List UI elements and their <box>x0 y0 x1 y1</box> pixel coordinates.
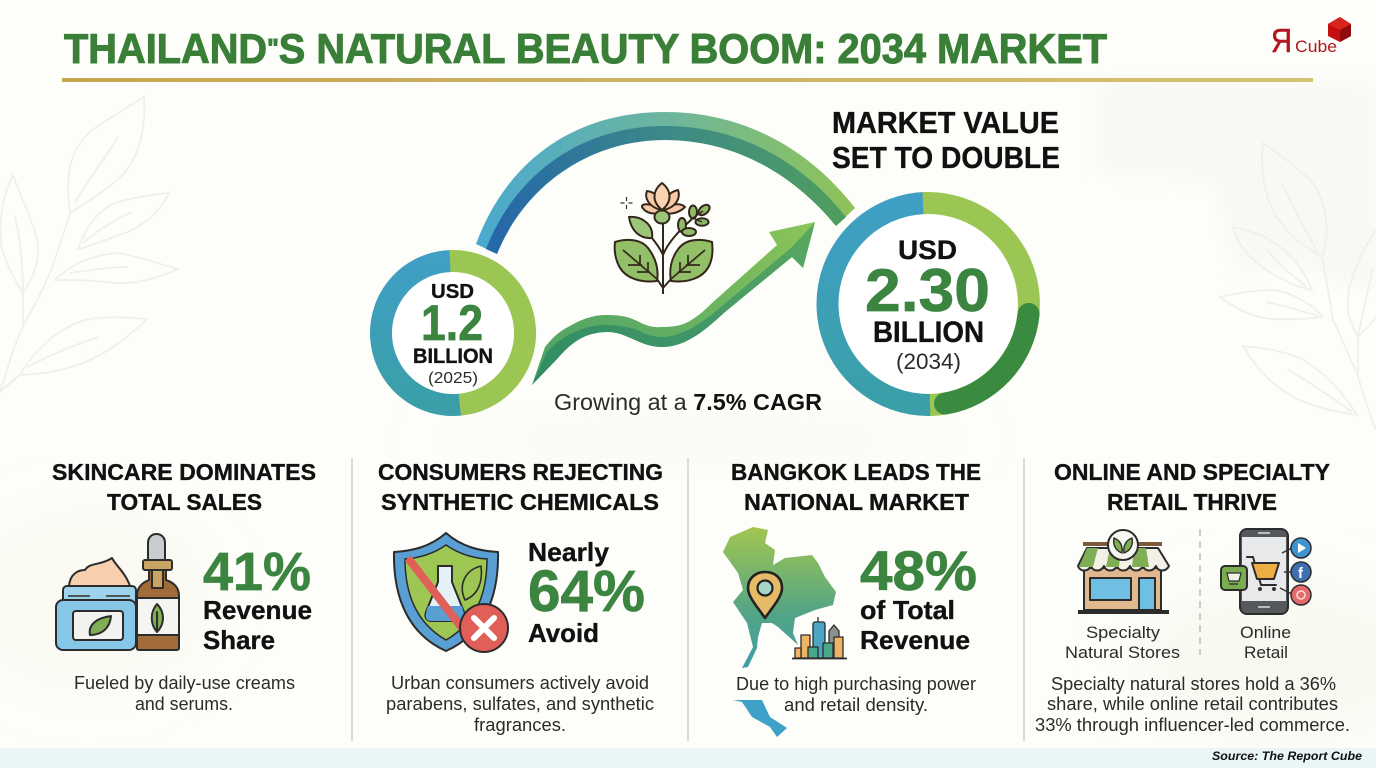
icon: online shopping phone: f <box>1298 565 1304 582</box>
panel: skincare <box>52 459 316 714</box>
icon: online shopping phone <box>1221 529 1311 614</box>
panel: bangkok: of Total <box>860 595 955 625</box>
growth arrow <box>532 222 815 385</box>
panel: online and specialty retail: share, while online retail contributes <box>1047 694 1338 714</box>
value ring 2034: 2.30 <box>865 257 990 324</box>
panel: skincare: and serums. <box>135 694 233 714</box>
store and online separator <box>1199 529 1201 655</box>
panel: bangkok <box>723 459 981 737</box>
panel: bangkok: 48% <box>860 539 977 602</box>
value ring 2025: (2025) <box>428 370 478 387</box>
panel: synthetic chemicals: SYNTHETIC CHEMICALS <box>381 489 659 515</box>
panel: online and specialty retail: Retail <box>1244 643 1288 662</box>
title underline <box>62 78 1313 82</box>
panel: online and specialty retail: RETAIL THRIVE <box>1107 489 1277 515</box>
panel: skincare: Fueled by daily-use creams <box>74 673 295 693</box>
icon: cream jar and serum bottle <box>56 534 179 650</box>
panel: skincare: 41% <box>203 542 311 602</box>
panel: online and specialty retail: ONLINE AND SPECIALTY <box>1054 459 1330 485</box>
logo: RCube: Cube <box>1295 37 1337 56</box>
icon: botanical plant <box>615 183 713 294</box>
value ring 2025: 1.2 <box>421 295 483 351</box>
value ring 2034: (2034) <box>896 349 961 374</box>
panel: online and specialty retail: 33% through influencer-led commerce. <box>1035 715 1350 735</box>
heading: market value set to double <box>832 105 1060 175</box>
panel: online and specialty retail: Specialty <box>1086 623 1161 642</box>
icon: shield with crossed flask <box>394 533 508 652</box>
title: " <box>267 33 279 63</box>
CAGR caption: Growing at a 7.5% CAGR <box>554 389 822 415</box>
growth arc <box>476 112 855 254</box>
value ring 2034 <box>827 203 1029 405</box>
panel: synthetic chemicals: fragrances. <box>474 715 566 735</box>
footer band <box>0 748 1376 768</box>
panel: synthetic chemicals: Urban consumers actively avoid <box>391 673 649 693</box>
panel: synthetic chemicals: CONSUMERS REJECTING <box>378 459 663 485</box>
title: S NATURAL BEAUTY BOOM: 2034 MARKET <box>279 25 1107 72</box>
value ring 2025: USD <box>431 281 474 303</box>
panel: skincare: Share <box>203 625 275 655</box>
logo: RCube: Я <box>1271 22 1292 59</box>
panel: online and specialty retail <box>1035 459 1350 735</box>
source note: Source: The Report Cube <box>1212 749 1362 763</box>
value ring 2034: BILLION <box>873 316 984 349</box>
panel: synthetic chemicals <box>378 459 663 735</box>
panel: synthetic chemicals: parabens, sulfates, and synthetic <box>386 694 654 714</box>
panel: bangkok: and retail density. <box>784 695 928 715</box>
icon: Thailand map with pin and city <box>723 527 847 737</box>
panel: synthetic chemicals: Avoid <box>528 618 599 648</box>
value ring 2025: BILLION <box>413 345 493 368</box>
panel: online and specialty retail: Natural Stores <box>1065 643 1180 662</box>
icon: specialty store <box>1078 530 1169 612</box>
panel: skincare: SKINCARE DOMINATES <box>52 459 316 485</box>
panel: synthetic chemicals: 64% <box>528 559 645 624</box>
value ring 2025 <box>381 261 525 405</box>
panel: bangkok: Revenue <box>860 625 970 655</box>
panel: synthetic chemicals: Nearly <box>528 537 610 567</box>
panel: online and specialty retail: Specialty natural stores hold a 36% <box>1051 674 1336 694</box>
panel: bangkok: NATIONAL MARKET <box>744 489 969 515</box>
title: THAILAND <box>64 25 279 72</box>
heading: market value set to double: MARKET VALUE <box>832 105 1059 140</box>
panel: bangkok: Due to high purchasing power <box>736 674 976 694</box>
value ring 2034: USD <box>898 235 957 265</box>
heading: market value set to double: SET TO DOUBLE <box>832 140 1060 175</box>
panel: bangkok: BANGKOK LEADS THE <box>731 459 981 485</box>
panel: skincare: TOTAL SALES <box>107 489 262 515</box>
panel: skincare: Revenue <box>203 595 312 625</box>
panel: online and specialty retail: Online <box>1240 623 1291 642</box>
column dividers <box>352 458 1024 741</box>
logo: RCube <box>1271 17 1351 59</box>
